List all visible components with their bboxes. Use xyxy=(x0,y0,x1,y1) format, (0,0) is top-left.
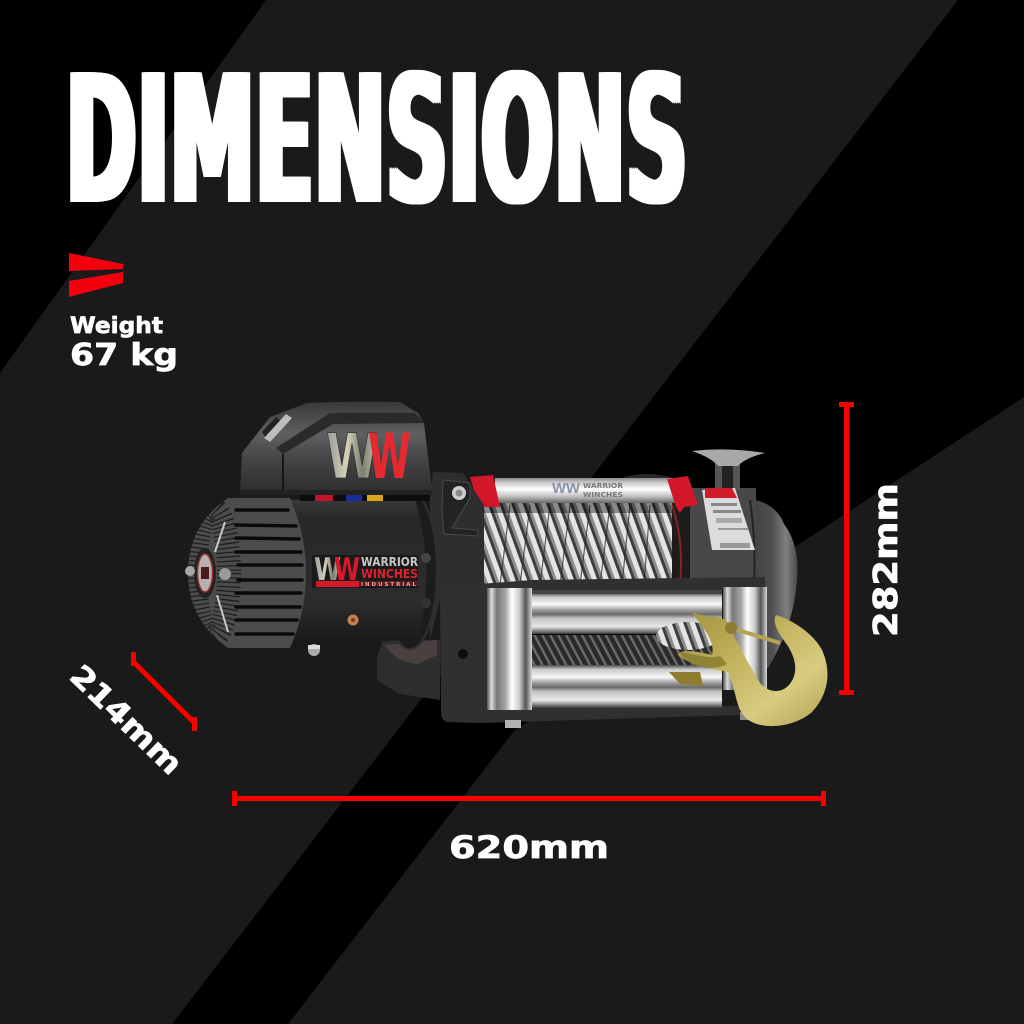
chrome tie bar xyxy=(495,478,677,503)
height dimension line xyxy=(839,402,854,695)
weight label: Weight xyxy=(70,314,164,339)
motor body xyxy=(290,500,431,656)
motor badge: WARRIOR xyxy=(361,555,418,569)
warning label xyxy=(702,488,755,550)
motor badge: W xyxy=(314,552,341,588)
chrome tie bar: WARRIOR xyxy=(583,482,624,490)
switch xyxy=(262,414,292,442)
winch product image xyxy=(185,402,827,728)
motor badge: INDUSTRIAL xyxy=(361,582,416,588)
fairlead frame xyxy=(440,577,765,728)
wire rope drum xyxy=(484,503,690,587)
motor flange ring xyxy=(383,491,437,649)
depth label: 214mm xyxy=(62,658,189,782)
width label: 620mm xyxy=(449,830,609,866)
title: DIMENSIONS xyxy=(66,37,688,244)
icon: weight chevron xyxy=(69,253,123,297)
motor badge xyxy=(312,552,418,588)
wire colour terminals xyxy=(300,493,430,501)
motor mounting plate xyxy=(430,472,484,640)
WW logo: W xyxy=(326,420,378,493)
hook and cable eye xyxy=(656,612,827,726)
WW logo: W xyxy=(368,420,411,493)
vertical rollers xyxy=(487,587,767,710)
base foot xyxy=(377,640,440,700)
chrome tie bar: WW xyxy=(552,480,581,497)
height label: 282mm xyxy=(866,483,905,637)
weight value: 67 kg xyxy=(70,338,178,373)
motor badge: W xyxy=(334,552,360,588)
chrome tie bar: WINCHES xyxy=(583,491,623,499)
motor badge: WINCHES xyxy=(361,567,418,581)
width dimension line xyxy=(232,791,826,806)
red bar clamps xyxy=(470,475,698,513)
controller box xyxy=(240,402,432,495)
cooling fins end cap xyxy=(185,498,306,648)
gear housing end cap xyxy=(617,474,797,668)
depth dimension line xyxy=(131,652,197,731)
horizontal rollers and inner cable xyxy=(532,593,722,708)
T-handle clutch knob xyxy=(692,449,765,490)
